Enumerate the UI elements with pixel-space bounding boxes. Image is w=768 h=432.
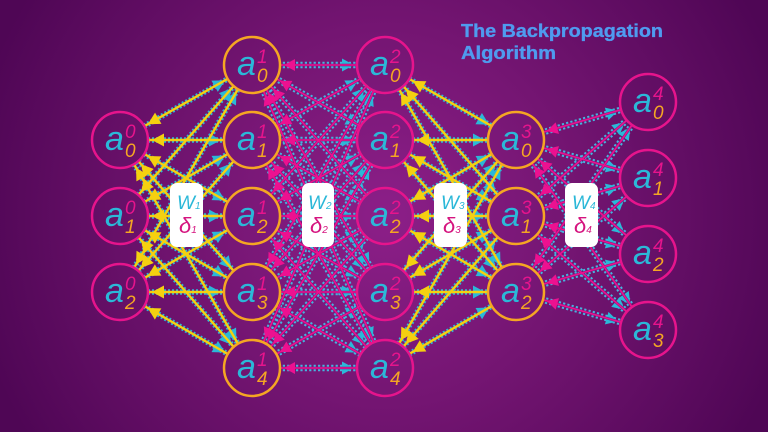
weight box W3: δ3 [443,213,461,238]
node a3 layer 1 [224,264,280,320]
node a0 layer 0 [92,112,148,168]
node a1 layer 1 [224,112,280,168]
node a0 layer 3: 0 [521,141,532,162]
node a1 layer 0: 0 [125,198,136,219]
node a2 layer 4 [620,226,676,282]
node a3 layer 2: 2 [389,274,401,295]
node a3 layer 4 [620,302,676,358]
node a4 layer 2: 2 [389,350,401,371]
node a0 layer 2: 0 [390,66,401,87]
node a2 layer 3: a [501,272,520,310]
weight box W4: W4 [572,193,596,214]
node a2 layer 0: 0 [125,274,136,295]
node a2 layer 4: 4 [653,236,664,257]
node a2 layer 2: 2 [389,198,401,219]
weight box W1 [170,183,203,247]
node a0 layer 0: a [105,120,124,158]
arrows: layer 3 to output layer [516,102,648,330]
node a0 layer 2 [357,37,413,93]
node a1 layer 1: 1 [257,122,268,143]
node a2 layer 1 [224,188,280,244]
weight box W4: δ4 [574,213,592,238]
node a2 layer 3: 3 [521,274,532,295]
node a1 layer 3: 1 [521,217,532,238]
node a4 layer 1: a [237,348,256,386]
node a0 layer 4: 0 [653,103,664,124]
weight box W3: W3 [441,193,465,214]
node a3 layer 4: 4 [653,312,664,333]
node a4 layer 1 [224,340,280,396]
node a2 layer 0: a [105,272,124,310]
node a2 layer 0 [92,264,148,320]
node a4 layer 2: 4 [390,369,401,390]
arrows: layer 2 to layer 3 [385,65,516,368]
node a2 layer 2 [357,188,413,244]
weight box W3 [434,183,467,247]
weight box W2: W2 [308,193,332,214]
node a1 layer 2: 2 [389,122,401,143]
node a1 layer 3: a [501,196,520,234]
node a1 layer 2: 1 [390,141,401,162]
weight box W2 [302,183,334,247]
arrows: input layer to layer 1 [120,65,252,368]
arrows: layer 1 to layer 2 [252,65,385,368]
node a2 layer 2: 2 [389,217,401,238]
node a1 layer 4: a [633,158,652,196]
node a0 layer 2: 2 [389,47,401,68]
node a3 layer 2: a [370,272,389,310]
node a2 layer 1: a [237,196,256,234]
node a2 layer 3: 2 [520,293,532,314]
node a4 layer 2 [357,340,413,396]
title: Algorithm [461,43,556,63]
node a0 layer 0: 0 [125,141,136,162]
title: The Backpropagation [461,21,663,41]
node a1 layer 2: a [370,120,389,158]
node a2 layer 4: a [633,234,652,272]
node a0 layer 1: 1 [257,47,268,68]
node a0 layer 4: 4 [653,84,664,105]
node a4 layer 1: 4 [257,369,268,390]
node a2 layer 2: a [370,196,389,234]
node a1 layer 3 [488,188,544,244]
node a1 layer 4: 1 [653,179,664,200]
node a0 layer 4: a [633,82,652,120]
node a2 layer 4: 2 [652,255,664,276]
weight box W1: W1 [177,193,200,214]
node a2 layer 1: 2 [256,217,268,238]
node a0 layer 3: 3 [521,122,532,143]
node a1 layer 2 [357,112,413,168]
weight box W4 [565,183,598,247]
node a2 layer 0: 2 [124,293,136,314]
node a3 layer 2: 3 [390,293,401,314]
node a3 layer 1: 1 [257,274,268,295]
node a2 layer 1: 1 [257,198,268,219]
node a0 layer 0: 0 [125,122,136,143]
node a1 layer 0 [92,188,148,244]
node a2 layer 3 [488,264,544,320]
node a3 layer 4: 3 [653,331,664,352]
node a1 layer 1: 1 [257,141,268,162]
node a1 layer 4: 4 [653,160,664,181]
node a3 layer 2 [357,264,413,320]
node a0 layer 3: a [501,120,520,158]
node a3 layer 1: 3 [257,293,268,314]
node a0 layer 1: a [237,45,256,83]
node a0 layer 3 [488,112,544,168]
node a3 layer 4: a [633,310,652,348]
weight box W1: δ1 [179,213,197,238]
node a1 layer 0: a [105,196,124,234]
node a1 layer 0: 1 [125,217,136,238]
node a4 layer 2: a [370,348,389,386]
node a0 layer 2: a [370,45,389,83]
node a4 layer 1: 1 [257,350,268,371]
weight box W2: δ2 [310,213,328,238]
node a0 layer 1: 0 [257,66,268,87]
node a1 layer 3: 3 [521,198,532,219]
node a3 layer 1: a [237,272,256,310]
node a0 layer 4 [620,74,676,130]
node a0 layer 1 [224,37,280,93]
node a1 layer 4 [620,150,676,206]
node a1 layer 1: a [237,120,256,158]
